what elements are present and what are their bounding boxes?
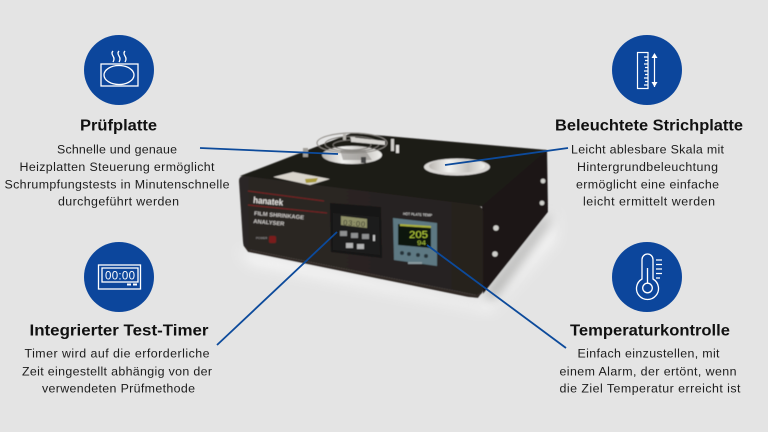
power switch [256, 236, 276, 243]
front panel [239, 176, 483, 295]
text: graticule description: leicht ermittelt werden [583, 194, 715, 208]
text: temperature description [560, 346, 741, 396]
text: graticule description [571, 142, 725, 208]
temperature controller: HOT PLATE TEMP [403, 212, 433, 218]
text: Prüfplatte description: Schnelle und genaue [57, 142, 177, 156]
heading: Prüfplatte: Prüfplatte [80, 118, 157, 134]
heading: Beleuchtete Strichplatte: Beleuchtete Strichplatte [555, 118, 743, 134]
side bolts [492, 179, 545, 257]
icon: heating plate [84, 35, 154, 105]
brand lines [248, 191, 324, 201]
heading: Integrierter Test-Timer: Integrierter Test-Timer [30, 322, 208, 340]
product name [253, 211, 304, 229]
illuminated graticule [424, 158, 490, 176]
text: temperature description: die Ziel Temperatur erreicht ist [560, 382, 741, 396]
temperature controller: 94 [417, 241, 427, 247]
timer unit [330, 203, 382, 258]
power switch: POWER [256, 236, 268, 240]
text: graticule description: Hintergrundbeleuchtung [577, 160, 718, 174]
icon: timer: 00:00 [105, 270, 135, 282]
temperature controller: 205 [409, 230, 428, 241]
top surface [240, 133, 547, 207]
text: timer description: verwendeten Prüfmethode [42, 382, 195, 396]
text: timer description: Timer wird auf die erforderliche [24, 346, 210, 360]
heating plate with fan guard [303, 133, 399, 164]
text: Prüfplatte description: Heizplatten Steuerung ermöglicht [20, 160, 215, 174]
text: graticule description: ermöglicht eine einfache [576, 178, 719, 192]
product name: FILM SHRINKAGE [254, 211, 304, 221]
leader line: temperature [427, 245, 566, 348]
icon: timer [84, 242, 154, 312]
product name: ANALYSER [253, 219, 285, 228]
side panel [482, 150, 548, 294]
brand name: hanatek [253, 195, 284, 208]
leader line: test plate [200, 148, 338, 154]
text: timer description [22, 346, 212, 396]
text: temperature description: einem Alarm, der ertönt, wenn [560, 364, 737, 378]
temperature controller [393, 212, 437, 266]
leader line: timer [217, 232, 337, 345]
text: Prüfplatte description: durchgeführt werden [58, 194, 179, 208]
text: timer description: Zeit eingestellt abhängig von der [22, 364, 212, 378]
icon: scale ruler [612, 35, 682, 105]
heading: Temperaturkontrolle: Temperaturkontrolle [570, 322, 730, 340]
warning label [273, 172, 330, 185]
text: graticule description: Leicht ablesbare Skala mit [571, 142, 725, 156]
leader line: graticule [445, 148, 568, 165]
timer unit: 03:00 [343, 218, 366, 229]
device: film shrinkage analyser [238, 133, 556, 312]
text: temperature description: Einfach einzustellen, mit [578, 346, 720, 360]
text: Prüfplatte description: Schrumpfungstests in Minutenschnelle [4, 178, 230, 192]
text: Prüfplatte description [4, 142, 230, 208]
icon: thermometer [612, 242, 682, 312]
